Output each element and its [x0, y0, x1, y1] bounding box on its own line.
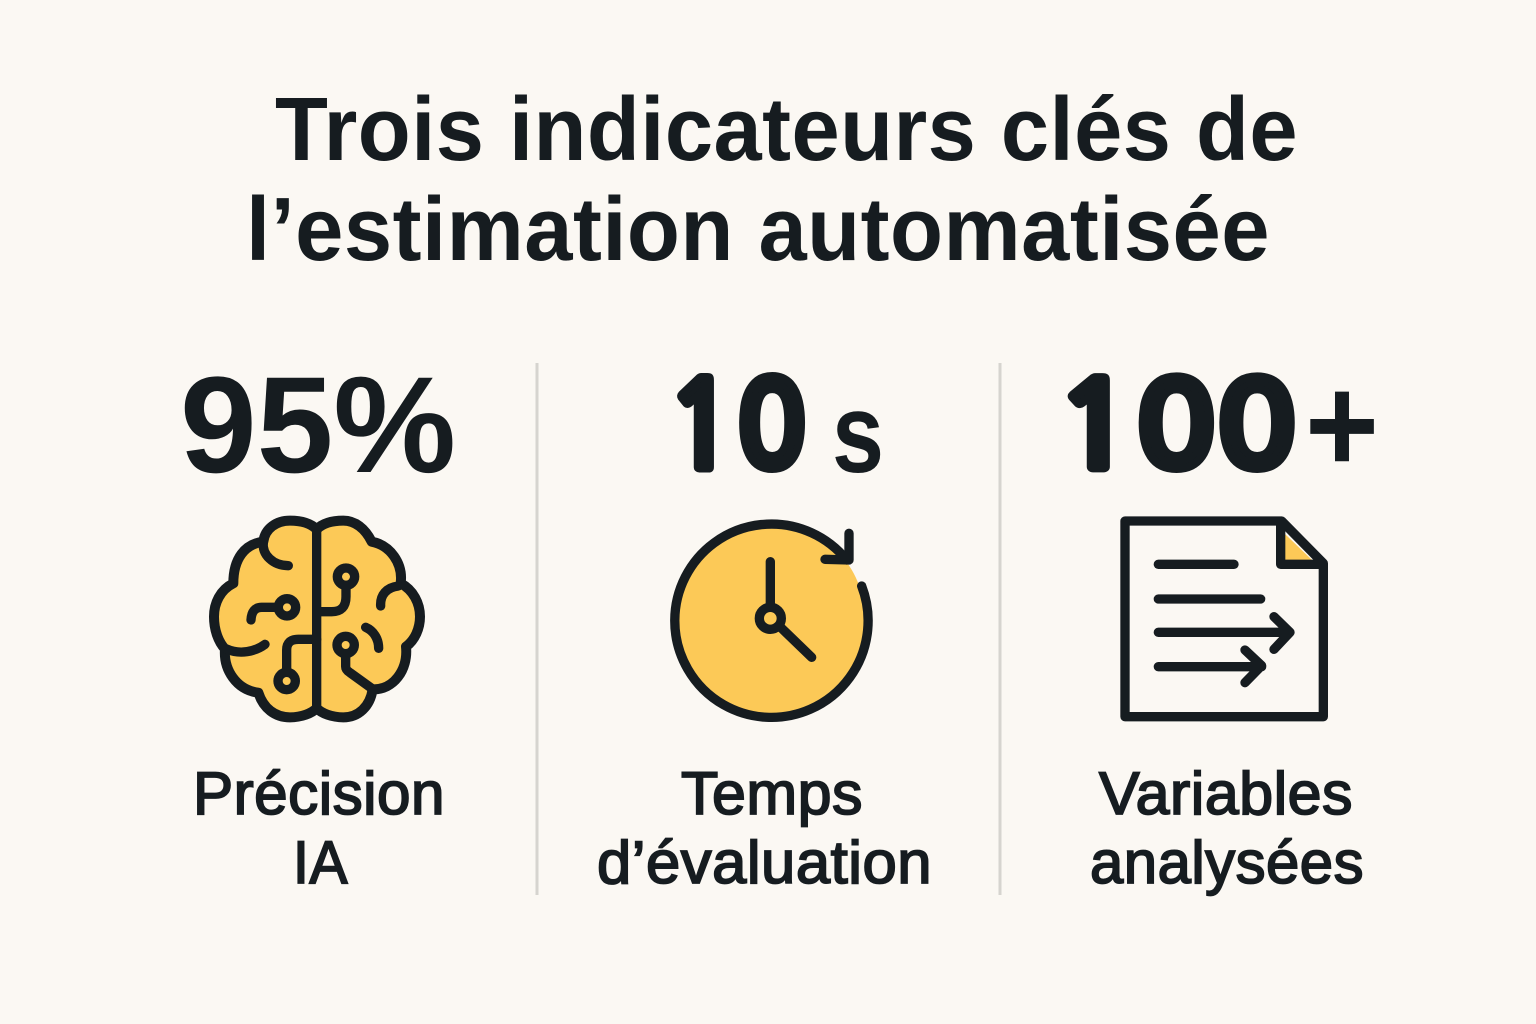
panel: précision IA [180, 349, 456, 896]
label: Précision IA: Précision [193, 760, 445, 827]
stat: 100+: 100 [1055, 367, 1297, 486]
title [246, 80, 1298, 280]
label: Précision IA: IA [293, 829, 348, 896]
title: Trois indicateurs clés de [275, 80, 1298, 180]
icon: document [1125, 521, 1323, 717]
title: l’estimation automatisée [246, 180, 1270, 280]
icon: brain [214, 521, 420, 717]
stat: 95%: 95% [180, 349, 456, 502]
panel: variables analysées [1055, 349, 1379, 896]
stat: 10 s [666, 367, 884, 496]
label: Temps d'évaluation [597, 760, 932, 896]
label: Précision IA [193, 760, 445, 896]
label: Temps d'évaluation: d’évaluation [597, 829, 932, 896]
stat: 10 s: 10 [666, 367, 807, 486]
icon: clock [675, 523, 868, 717]
stat: 100+: + [1305, 349, 1379, 502]
stat: 10 s: s [832, 371, 884, 496]
label: Variables analysées: analysées [1090, 829, 1364, 896]
label: Variables analysées [1090, 760, 1364, 896]
label: Variables analysées: Variables [1099, 760, 1353, 827]
stat: 100+ [1055, 349, 1379, 502]
label: Temps d'évaluation: Temps [681, 760, 863, 827]
panel: temps d'évaluation [597, 367, 932, 896]
